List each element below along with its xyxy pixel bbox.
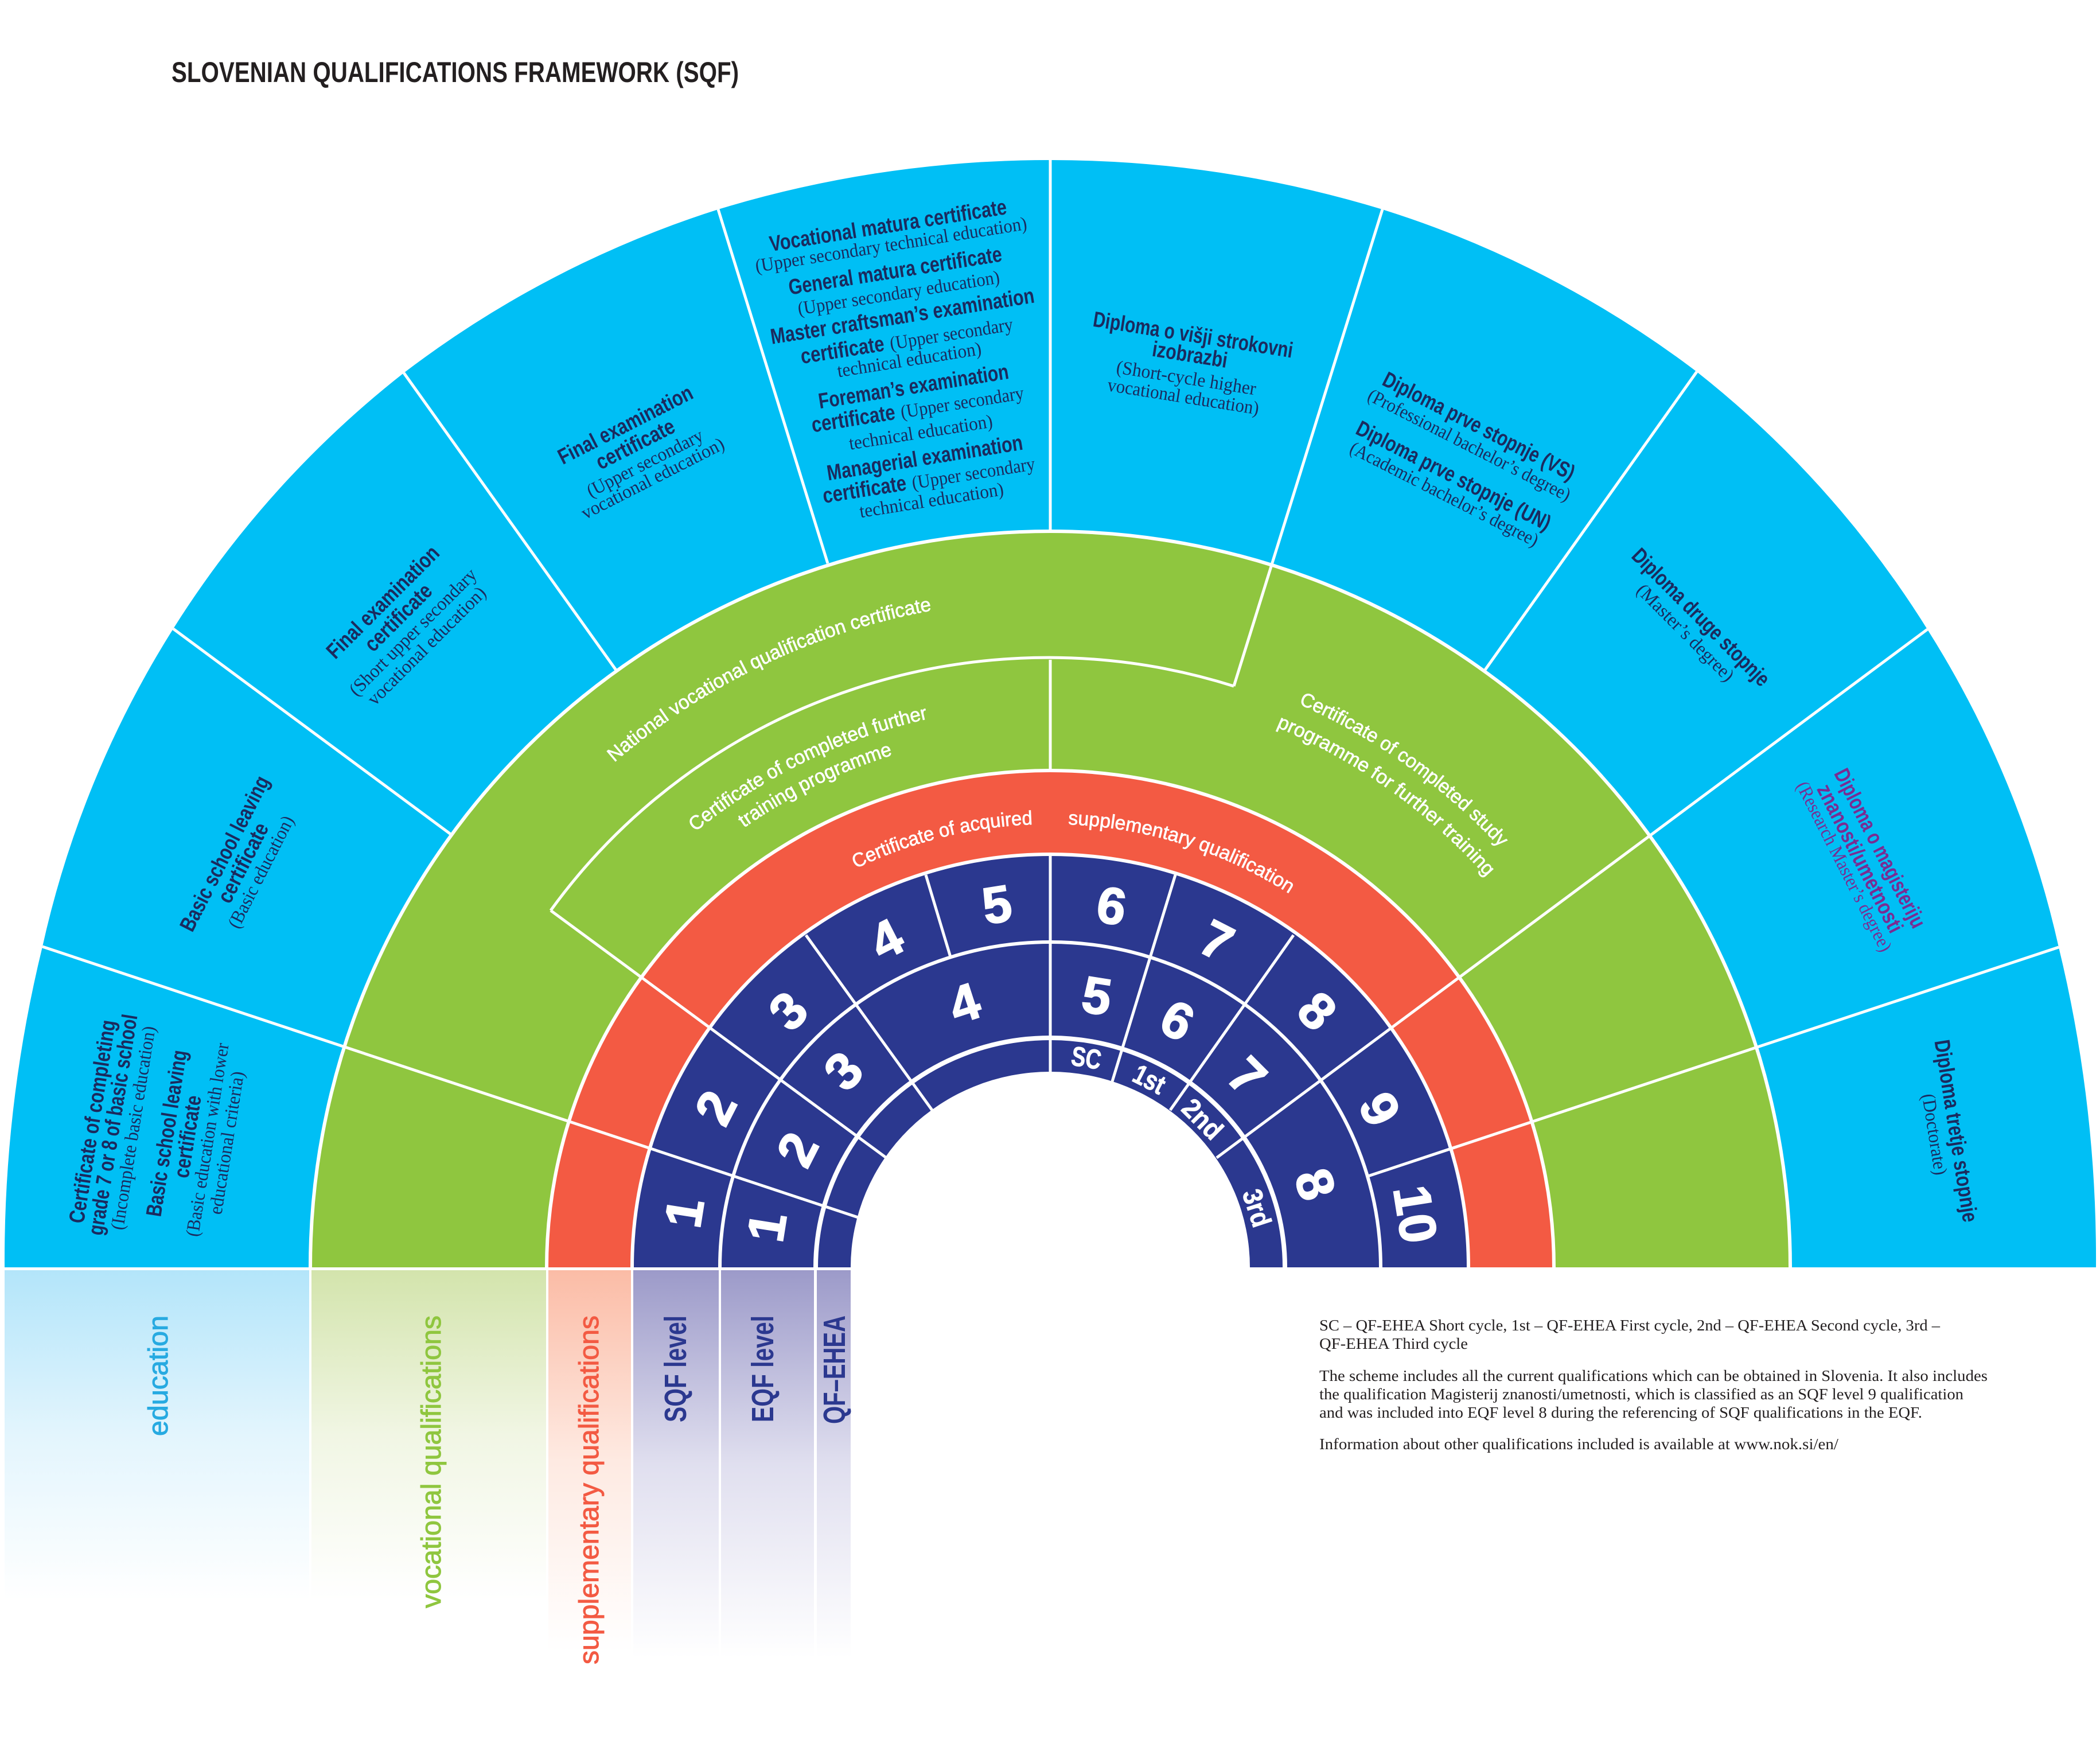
- QF-EHEA cycle labels: 1st: [1128, 1059, 1170, 1100]
- panel: sector 10 doctorate diploma: Diploma tretje stopnje: [1930, 1038, 1982, 1224]
- panel: sector 1 basic school certificates: grade 7 or 8 of basic school: [84, 1013, 143, 1237]
- label: certificate of completed study programme for further training: Certificate of completed study: [1301, 694, 1508, 846]
- panel: sector 5 matura and examination certificates: Master craftsman’s examination: [769, 284, 1036, 349]
- explanatory notes: Information about other qualifications included is available at www.nok.si/en/: [1319, 1435, 1839, 1453]
- ring: education (blue): [5, 160, 2096, 1267]
- panel: sector 8 master diploma: [1612, 544, 1774, 706]
- panel: sector 5 matura and examination certificates: Vocational matura certificate: [767, 195, 1008, 256]
- EQF level numbers: [737, 966, 1346, 1246]
- panel: sector 5 matura and examination certificates: (Upper secondary: [899, 383, 1026, 423]
- panel: sector 1 basic school certificates: (Basic education with lower: [182, 1041, 233, 1238]
- label: certificate of completed further training programme: training programme: [738, 746, 891, 827]
- SQF level numbers: [654, 874, 1448, 1247]
- SQF level numbers: 5: [979, 874, 1016, 936]
- legend strip: supplementary qualifications: supplementary qualifications: [574, 1316, 605, 1664]
- panel: sector 2 basic school leaving certificate: (Basic education): [224, 812, 298, 932]
- panel: sector 9 research master diploma: [1792, 759, 1933, 955]
- panel: sector 8 master diploma: Diploma druge stopnje: [1627, 544, 1774, 691]
- panel: sector 5 matura and examination certificates: [750, 192, 1069, 532]
- legend strip: supplementary qualifications: [548, 1270, 631, 1664]
- panel: sector 1 basic school certificates: Certificate of completing: [65, 1018, 121, 1225]
- panel: sector 6 short-cycle diploma: [1082, 308, 1295, 423]
- panel: sector 6 short-cycle diploma: (Short-cycle higher: [1115, 357, 1257, 399]
- panel: sector 4 final examination certificate, upper secondary: Final examination: [554, 381, 697, 469]
- panel: sector 5 matura and examination certificates: certificate: [810, 400, 897, 438]
- panel: sector 8 master diploma: (Master’s degree): [1633, 580, 1738, 686]
- panel: sector 10 doctorate diploma: (Doctorate): [1918, 1092, 1951, 1177]
- panel: sector 4 final examination certificate, upper secondary: (Upper secondary: [583, 425, 707, 501]
- panel: sector 1 basic school certificates: certificate: [170, 1094, 207, 1180]
- SQF level numbers: 10: [1382, 1181, 1448, 1247]
- explanatory notes: QF-EHEA Third cycle: [1319, 1335, 1468, 1352]
- panel: sector 1 basic school certificates: (Incomplete basic education): [107, 1025, 160, 1231]
- label: certificate of completed further training programme: Certificate of completed further: [689, 709, 926, 830]
- legend strip: vocational qualifications: [311, 1270, 546, 1608]
- panel: sector 2 basic school leaving certificate: Basic school leaving: [176, 772, 275, 935]
- legend strip: education: education: [143, 1316, 174, 1436]
- legend strip: QF-EHEA: [817, 1270, 852, 1658]
- panel: sector 5 matura and examination certificates: Managerial examination: [825, 431, 1024, 485]
- panel: sector 4 final examination certificate, upper secondary: vocational education): [578, 434, 728, 524]
- SQF level numbers: 8: [1287, 981, 1347, 1042]
- EQF level numbers: 7: [1216, 1046, 1277, 1107]
- legend strip: EQF level: EQF level: [746, 1316, 780, 1422]
- ring: SQF, EQF and QF-EHEA levels (navy): [632, 854, 1468, 1267]
- title: SLOVENIAN QUALIFICATIONS FRAMEWORK (SQF): [172, 56, 739, 88]
- ring: vocational qualifications (green): [310, 531, 1790, 1267]
- panel: sector 3 final examination certificate, short upper secondary: Final examination: [322, 541, 445, 664]
- explanatory notes: the qualification Magisterij znanosti/umetnosti, which is classified as an SQF level 9 qualification: [1319, 1386, 1964, 1403]
- EQF level numbers: 4: [942, 972, 987, 1036]
- panel: sector 5 matura and examination certificates: certificate: [821, 471, 908, 508]
- EQF level numbers: 2: [766, 1124, 830, 1176]
- panel: sector 5 matura and examination certificates: (Upper secondary: [910, 454, 1037, 493]
- panel: sector 6 short-cycle diploma: vocational education): [1106, 375, 1260, 419]
- legend strip: education: [5, 1270, 309, 1601]
- QF-EHEA cycle labels: 2nd: [1175, 1093, 1229, 1146]
- panel: sector 1 basic school certificates: [64, 1010, 255, 1255]
- SQF level numbers: 3: [758, 981, 819, 1042]
- label: certificate of acquired supplementary qualification: Certificate of acquired: [852, 810, 1031, 866]
- EQF level numbers: 1: [737, 1208, 798, 1246]
- SQF level numbers: 6: [1093, 876, 1130, 937]
- SQF level numbers: 4: [861, 908, 913, 972]
- explanatory notes: The scheme includes all the current qualifications which can be obtained in Slovenia. It also includes: [1319, 1367, 1988, 1384]
- panel: sector 2 basic school leaving certificate: certificate: [213, 819, 274, 907]
- panel: sector 4 final examination certificate, upper secondary: certificate: [592, 414, 679, 474]
- explanatory notes: and was included into EQF level 8 during the referencing of SQF qualifications in the EQF.: [1319, 1404, 1922, 1421]
- panel: sector 2 basic school leaving certificate: [176, 772, 309, 953]
- legend strip: vocational qualifications: vocational qualifications: [416, 1316, 447, 1608]
- panel: sector 3 final examination certificate, short upper secondary: [314, 533, 495, 714]
- label: national vocational qualification certificate: National vocational qualification certificate: [606, 600, 930, 762]
- panel: sector 5 matura and examination certificates: (Upper secondary technical education): [754, 213, 1028, 277]
- panel: sector 5 matura and examination certificates: technical education): [836, 338, 983, 382]
- panel: sector 5 matura and examination certificates: (Upper secondary education): [796, 267, 1001, 320]
- panel: sector 9 research master diploma: (Research Master’s degree): [1792, 778, 1896, 955]
- panel: sector 7 bachelor diplomas: (Professional bachelor’s degree): [1364, 385, 1574, 505]
- label: certificate of completed study programme for further training: programme for further training: [1276, 717, 1494, 878]
- legend strip: SQF level: [633, 1270, 719, 1658]
- ring: supplementary qualifications (orange): [547, 771, 1554, 1267]
- panel: sector 7 bachelor diplomas: Diploma prve stopnje (VS): [1378, 368, 1579, 485]
- panel: sector 7 bachelor diplomas: Diploma prve stopnje (UN): [1352, 417, 1554, 536]
- EQF level numbers: 3: [813, 1041, 874, 1102]
- panel: sector 7 bachelor diplomas: [1339, 365, 1584, 555]
- panel: sector 9 research master diploma: Diploma o magisteriju: [1829, 765, 1930, 932]
- SQF level numbers: 9: [1347, 1084, 1411, 1135]
- panel: sector 3 final examination certificate, short upper secondary: vocational education): [364, 583, 490, 710]
- EQF level numbers: 5: [1078, 966, 1115, 1027]
- legend strip: EQF level: [721, 1270, 814, 1658]
- QF-EHEA cycle labels: 3rd: [1236, 1185, 1277, 1231]
- SQF level numbers: 1: [654, 1194, 715, 1232]
- panel: sector 5 matura and examination certificates: certificate: [799, 332, 886, 369]
- label: certificate of acquired supplementary qualification: supplementary qualification: [1068, 814, 1293, 894]
- panel: sector 6 short-cycle diploma: izobrazbi: [1151, 337, 1229, 373]
- explanatory notes: SC – QF-EHEA Short cycle, 1st – QF-EHEA First cycle, 2nd – QF-EHEA Second cycle, 3rd –: [1319, 1317, 1941, 1334]
- explanatory notes: [1319, 1317, 1988, 1453]
- centre hole: [851, 1072, 1250, 1267]
- panel: sector 9 research master diploma: znanosti/umetnosti: [1812, 780, 1907, 937]
- panel: sector 3 final examination certificate, short upper secondary: certificate: [360, 579, 437, 656]
- SQF level numbers: 7: [1191, 909, 1242, 973]
- panel: sector 3 final examination certificate, short upper secondary: (Short upper secondary: [345, 564, 481, 701]
- legend strip: SQF level: SQF level: [659, 1316, 693, 1422]
- QF-EHEA cycle labels: [1069, 1041, 1277, 1231]
- EQF level numbers: 8: [1283, 1162, 1346, 1207]
- panel: sector 5 matura and examination certificates: General matura certificate: [787, 243, 1004, 300]
- panel: sector 5 matura and examination certificates: technical education): [858, 479, 1005, 522]
- QF-EHEA cycle labels: SC: [1069, 1041, 1104, 1076]
- label: certificate of acquired supplementary qualification: [852, 810, 1293, 894]
- panel: sector 7 bachelor diplomas: (Academic bachelor’s degree): [1346, 438, 1542, 551]
- panel: sector 1 basic school certificates: educational criteria): [205, 1070, 248, 1216]
- panel: sector 6 short-cycle diploma: Diploma o višji strokovni: [1092, 308, 1295, 363]
- SQF level numbers: 2: [684, 1082, 748, 1134]
- EQF level numbers: 6: [1151, 989, 1203, 1053]
- panel: sector 1 basic school certificates: Basic school leaving: [142, 1048, 192, 1218]
- panel: sector 5 matura and examination certificates: technical education): [848, 411, 994, 454]
- panel: sector 5 matura and examination certificates: (Upper secondary: [889, 314, 1015, 354]
- panel: sector 4 final examination certificate, upper secondary: [550, 379, 728, 524]
- panel: sector 10 doctorate diploma: [1910, 1038, 1982, 1227]
- legend strip: QF-EHEA: QF–EHEA: [817, 1316, 852, 1424]
- panel: sector 5 matura and examination certificates: Foreman’s examination: [817, 360, 1010, 414]
